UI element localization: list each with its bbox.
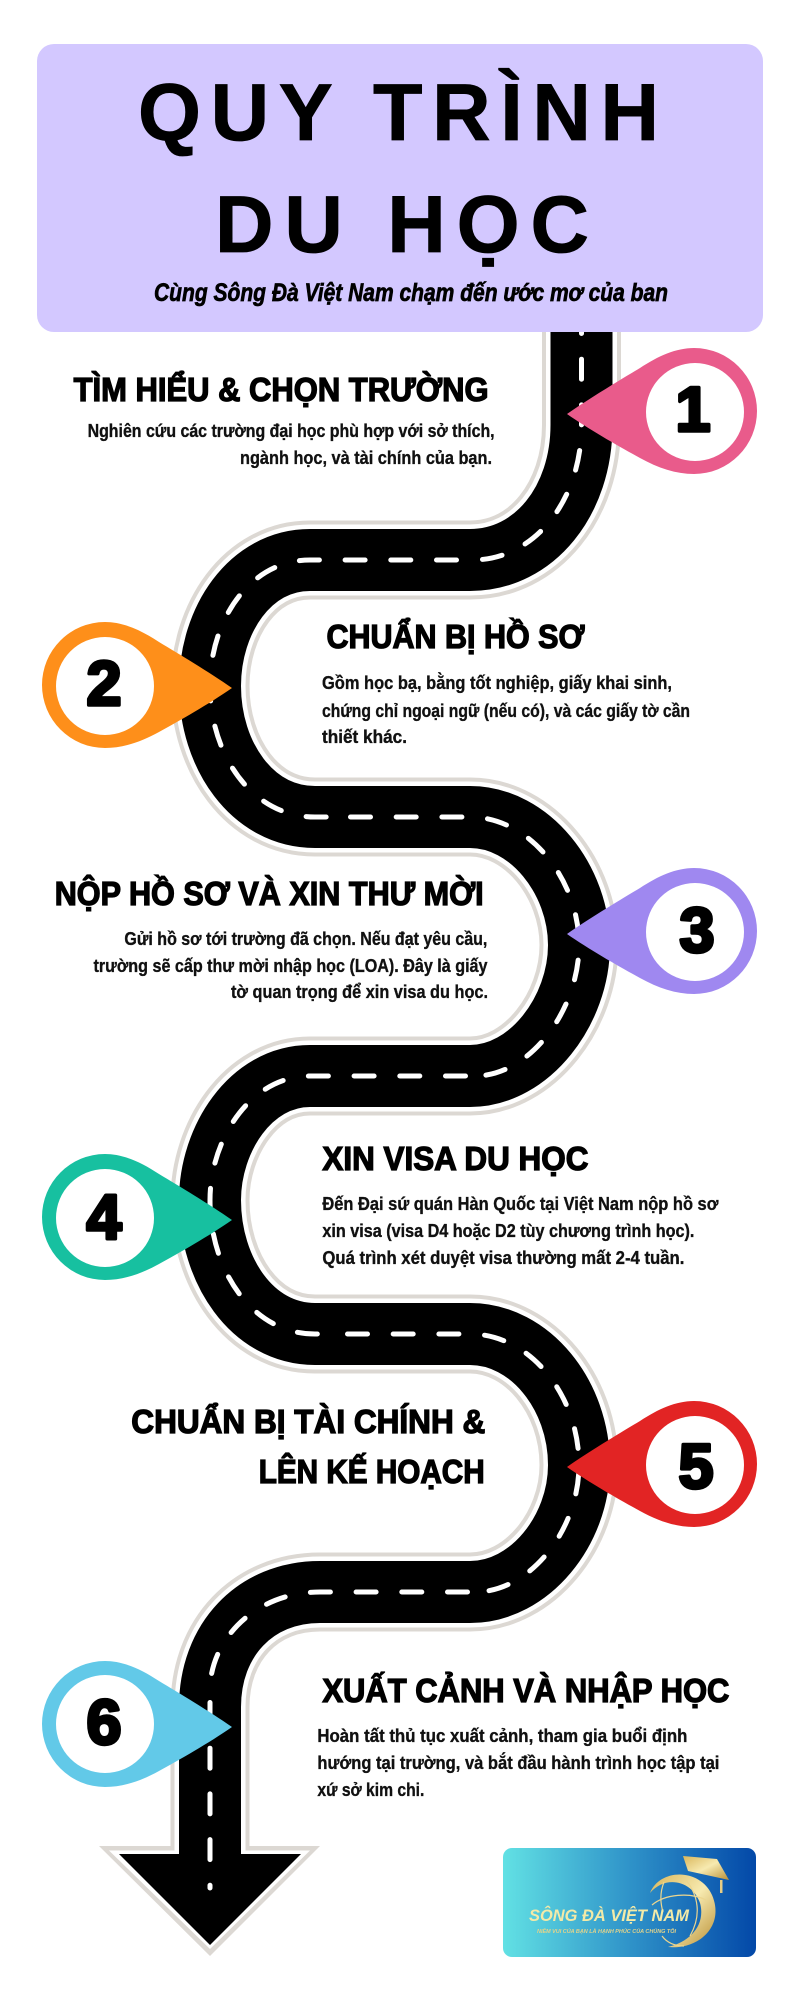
step 3 text: Gửi hồ sơ tới trường đã chọn. Nếu đạt yêu cầu,	[124, 928, 487, 949]
subtitle: Cùng Sông Đà Việt Nam chạm đến ước mơ của ban	[154, 279, 668, 307]
title line 2: DU HỌC	[215, 180, 589, 270]
step 5 text	[131, 1403, 485, 1490]
step 5 pin	[567, 1401, 757, 1527]
step 1 pin	[567, 348, 757, 474]
step 1 text: ngành học, và tài chính của bạn.	[240, 447, 492, 468]
step 5 text: CHUẨN BỊ TÀI CHÍNH &	[131, 1403, 485, 1440]
step 2 text: thiết khác.	[322, 726, 407, 747]
step 1 text: TÌM HIỂU & CHỌN TRƯỜNG	[74, 371, 489, 408]
step 2 text: chứng chỉ ngoại ngữ (nếu có), và các giấy tờ cần	[322, 700, 690, 721]
step 6 text: xứ sở kim chi.	[317, 1779, 424, 1800]
step 4 pin	[42, 1154, 232, 1280]
step 5 text: LÊN KẾ HOẠCH	[259, 1453, 485, 1490]
step 1 pin: 1	[675, 375, 711, 445]
step 5 pin: 5	[678, 1432, 714, 1502]
logo: Sông Đà Việt Nam	[503, 1848, 756, 1957]
step 4 text: Quá trình xét duyệt visa thường mất 2-4 tuần.	[322, 1247, 684, 1268]
step 3 text: tờ quan trọng để xin visa du học.	[231, 981, 488, 1002]
step 2 pin: 2	[86, 649, 122, 719]
step 6 text	[317, 1672, 729, 1800]
step 2 text: Gồm học bạ, bằng tốt nghiệp, giấy khai sinh,	[322, 672, 672, 693]
step 4 text: XIN VISA DU HỌC	[322, 1140, 588, 1177]
step 6 text: Hoàn tất thủ tục xuất cảnh, tham gia buổi định	[317, 1725, 687, 1746]
step 4 text: Đến Đại sứ quán Hàn Quốc tại Việt Nam nộp hồ sơ	[322, 1193, 719, 1214]
step 2 pin	[42, 622, 232, 748]
step 2 text	[322, 618, 690, 747]
step 4 pin: 4	[86, 1183, 122, 1253]
step 4 text: xin visa (visa D4 hoặc D2 tùy chương trình học).	[322, 1220, 694, 1241]
step 3 text	[55, 874, 488, 1002]
step 3 text: NỘP HỒ SƠ VÀ XIN THƯ MỜI	[55, 874, 484, 912]
title line 1: QUY TRÌNH	[138, 67, 659, 158]
icon: graduation cap	[683, 1856, 729, 1893]
panel: title banner	[37, 44, 763, 332]
step 2 text: CHUẨN BỊ HỒ SƠ	[326, 618, 585, 655]
step 3 pin: 3	[679, 896, 715, 966]
logo wordmark: SÔNG ĐÀ VIỆT NAM	[529, 1906, 690, 1925]
logo tagline: NIỀM VUI CỦA BẠN LÀ HẠNH PHÚC CỦA CHÚNG TÔI	[537, 1927, 676, 1935]
step 6 pin	[42, 1661, 232, 1787]
step 3 text: trường sẽ cấp thư mời nhập học (LOA). Đây là giấy	[94, 955, 488, 976]
icon: gold globe	[650, 1874, 716, 1947]
step 3 pin	[567, 868, 757, 994]
step 4 text	[322, 1140, 719, 1268]
step 6 text: XUẤT CẢNH VÀ NHẬP HỌC	[322, 1672, 729, 1709]
step 6 text: hướng tại trường, và bắt đầu hành trình học tập tại	[317, 1752, 719, 1773]
step 1 text: Nghiên cứu các trường đại học phù hợp với sở thích,	[88, 420, 495, 441]
road with arrow	[99, 314, 582, 1956]
step 1 text	[74, 371, 495, 468]
step 6 pin: 6	[86, 1688, 122, 1758]
